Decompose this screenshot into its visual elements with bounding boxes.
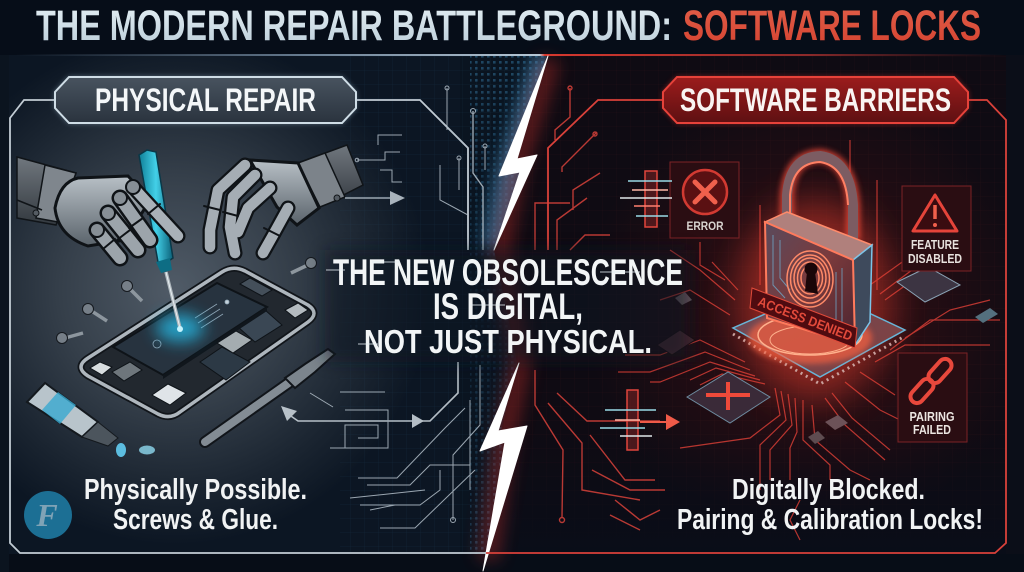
caption: physical side: Screws & Glue. bbox=[113, 504, 278, 536]
frame and connectors: software side bbox=[486, 100, 1006, 553]
battery markings bbox=[153, 300, 229, 348]
icon: firewall gate lower with arrow bbox=[600, 390, 680, 450]
badge: physical repair bbox=[55, 77, 356, 123]
callout: central statement: NOT JUST PHYSICAL. bbox=[364, 323, 652, 360]
icon: x in circle bbox=[683, 170, 727, 214]
icon: logo badge: F bbox=[35, 497, 58, 533]
caption: physical side: Physically Possible. bbox=[84, 474, 307, 506]
illustration: left robotic hand holding screwdriver bbox=[17, 150, 183, 332]
callout: central statement bbox=[325, 250, 690, 362]
circuit decoration: left center bbox=[281, 86, 487, 528]
screwdriver bbox=[139, 150, 183, 332]
phone components bbox=[90, 278, 308, 405]
badge: physical repair: PHYSICAL REPAIR bbox=[95, 82, 316, 118]
fingers bbox=[97, 187, 178, 258]
illustration: padlock bbox=[750, 156, 872, 348]
phone body bbox=[81, 268, 314, 417]
icon: broken chain link bbox=[908, 356, 954, 406]
forearm bbox=[298, 145, 363, 207]
shackle bbox=[787, 156, 853, 240]
illustration: spudger tool bbox=[205, 349, 335, 442]
fingerprint bbox=[787, 251, 833, 307]
callout: error: ERROR bbox=[686, 219, 724, 233]
callout: feature disabled: DISABLED bbox=[908, 252, 962, 266]
icon: logo badge bbox=[24, 491, 72, 539]
callout: central statement: IS DIGITAL, bbox=[433, 286, 583, 327]
illustration: circuit board traces bbox=[618, 140, 1000, 540]
blue glow along divider bbox=[494, 55, 547, 250]
battery bbox=[113, 283, 267, 375]
forearm bbox=[17, 157, 76, 225]
fingers bbox=[204, 165, 288, 253]
lock side bbox=[853, 245, 872, 345]
callout: feature disabled: FEATURE bbox=[911, 238, 959, 252]
circuit decoration: right center bbox=[535, 86, 665, 530]
illustration: phone being repaired bbox=[81, 268, 314, 417]
knuckles bbox=[90, 180, 140, 237]
lock top bbox=[765, 212, 872, 260]
badge: software barriers bbox=[663, 77, 968, 123]
red glow along divider bbox=[488, 60, 550, 560]
circuit etching on lock bbox=[773, 235, 842, 325]
illustration: glue tube bbox=[27, 383, 155, 457]
caption: physical side bbox=[84, 474, 307, 536]
callout: pairing failed bbox=[898, 353, 967, 442]
callout: central statement: THE NEW OBSOLESCENCE bbox=[333, 252, 683, 293]
palm bbox=[250, 160, 319, 225]
title: THE MODERN REPAIR BATTLEGROUND: bbox=[36, 2, 672, 50]
caption: software side bbox=[677, 474, 983, 536]
illustration: lock glow bbox=[740, 200, 890, 400]
illustration: chip under lock bbox=[733, 290, 905, 384]
callout: pairing failed: PAIRING bbox=[910, 410, 954, 424]
frame and connectors: physical side bbox=[10, 100, 490, 553]
palm bbox=[55, 176, 150, 246]
center split: lightning divider bbox=[480, 56, 548, 571]
icon: firewall gate upper bbox=[620, 171, 672, 227]
illustration: secondary chips bbox=[657, 267, 998, 444]
icon: warning triangle bbox=[913, 195, 957, 231]
caption: software side: Digitally Blocked. bbox=[732, 474, 925, 506]
banner: access denied: ACCESS DENIED bbox=[756, 294, 855, 344]
panel: left physical repair background bbox=[0, 55, 560, 572]
lock front bbox=[765, 222, 855, 345]
pins bbox=[733, 334, 905, 384]
callout: error bbox=[670, 162, 739, 238]
callout: feature disabled bbox=[902, 186, 971, 271]
keyhole bbox=[804, 262, 818, 294]
callout: pairing failed: FAILED bbox=[913, 423, 951, 437]
illustration: screws bbox=[56, 258, 316, 344]
illustration: right robotic hand bbox=[204, 145, 363, 253]
screwdriver glow bbox=[156, 314, 204, 342]
